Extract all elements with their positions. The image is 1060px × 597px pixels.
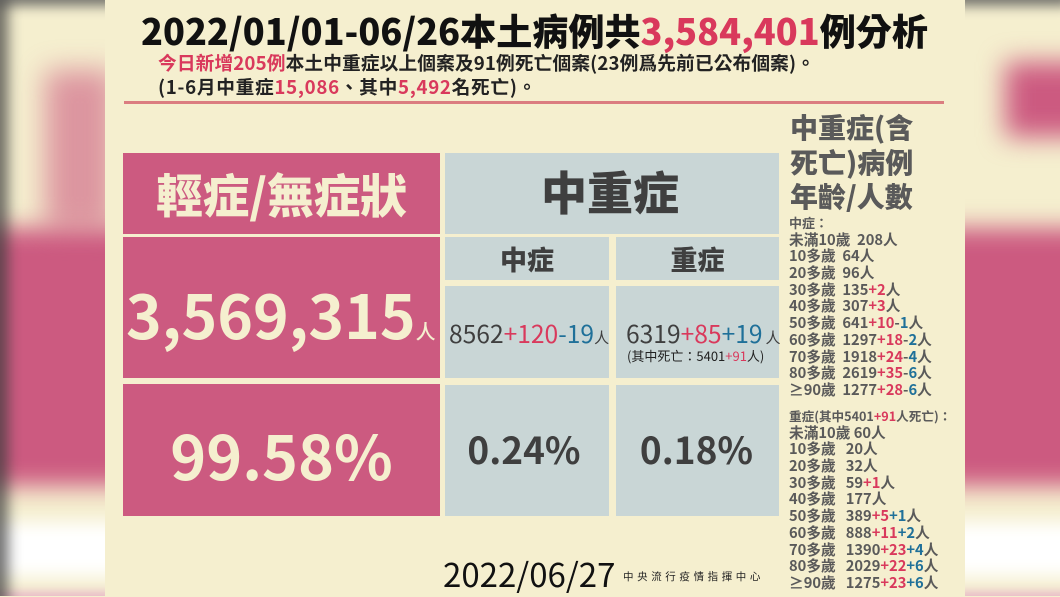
severe age list: 70多歲 1390+23+4人 [789,538,938,560]
divider line [124,101,944,104]
severe age list: 30多歲 59+1人 [789,472,895,493]
moderate label [445,237,609,280]
moderate age list: 70多歲 1918+24-4人 [789,346,932,366]
subtitle line 2: (1-6月中重症15,086、其中5,492名死亡)。 [158,73,537,100]
title: 2022/01/01-06/26本土病例共3,584,401例分析 [141,4,928,56]
severe age list: 未滿10歲 60人 [789,422,886,443]
moderate age list: 40多歲 307+3人 [789,295,900,316]
moderate age list [789,213,932,400]
mild percent [123,384,440,516]
severe age list: 10多歲 20人 [789,438,878,459]
severe age list: 40多歲 177人 [789,488,886,509]
severe label: 重症 [670,239,724,278]
severe age list: 80多歲 2029+22+6人 [789,555,938,576]
header: moderate and severe [445,153,779,234]
moderate age list: 50多歲 641+10-1人 [789,312,923,333]
source: 中央流行疫情指揮中心 [623,569,764,584]
date: 2022/06/27 [443,549,615,597]
severe age list: 50多歲 389+5+1人 [789,505,921,526]
moderate age list: 30多歲 135+2人 [789,279,900,300]
header: mild: 輕症/無症狀 [156,160,407,227]
severe deaths note: (其中死亡：5401+91人) [627,346,764,365]
header: mild [123,153,440,234]
moderate age list: 20多歲 96人 [789,262,874,283]
moderate age list: 60多歲 1297+18-2人 [789,329,932,350]
subtitle line 1: 今日新增205例本土中重症以上個案及91例死亡個案(23例爲先前已公布個案)。 [158,49,815,76]
severe age list: 60多歲 888+11+2人 [789,522,930,543]
mild count [123,237,440,378]
severe percent [616,385,779,516]
moderate percent [445,385,609,516]
severe count [616,286,779,378]
moderate age list: 10多歲 64人 [789,245,874,266]
severe age list: 20多歲 32人 [789,455,878,476]
moderate age list: 80多歲 2619+35-6人 [789,362,932,383]
moderate age list: 中症： [789,213,828,232]
moderate count [445,286,609,378]
moderate percent: 0.24% [467,420,581,474]
severe age list [789,406,951,593]
header: moderate and severe: 中重症 [541,158,679,224]
severe label [616,237,779,280]
mild count: 3,569,315人 [126,270,436,357]
moderate label: 中症 [500,239,554,278]
moderate age list: 未滿10歲 208人 [789,229,898,250]
severe age list: ≥90歲 1275+23+6人 [789,572,938,593]
severe age list: 重症(其中5401+91人死亡)： [789,406,951,425]
side heading: 死亡)病例 [790,142,913,182]
side heading: 中重症(含 [790,107,913,147]
moderate count: 8562+120-19人 [449,315,609,351]
severe count: 6319+85+19 人 [626,315,781,351]
moderate age list: ≥90歲 1277+28-6人 [789,379,932,400]
side heading [790,107,913,216]
side heading: 年齡/人數 [790,176,913,216]
mild percent: 99.58% [170,408,393,498]
severe percent: 0.18% [640,420,753,474]
